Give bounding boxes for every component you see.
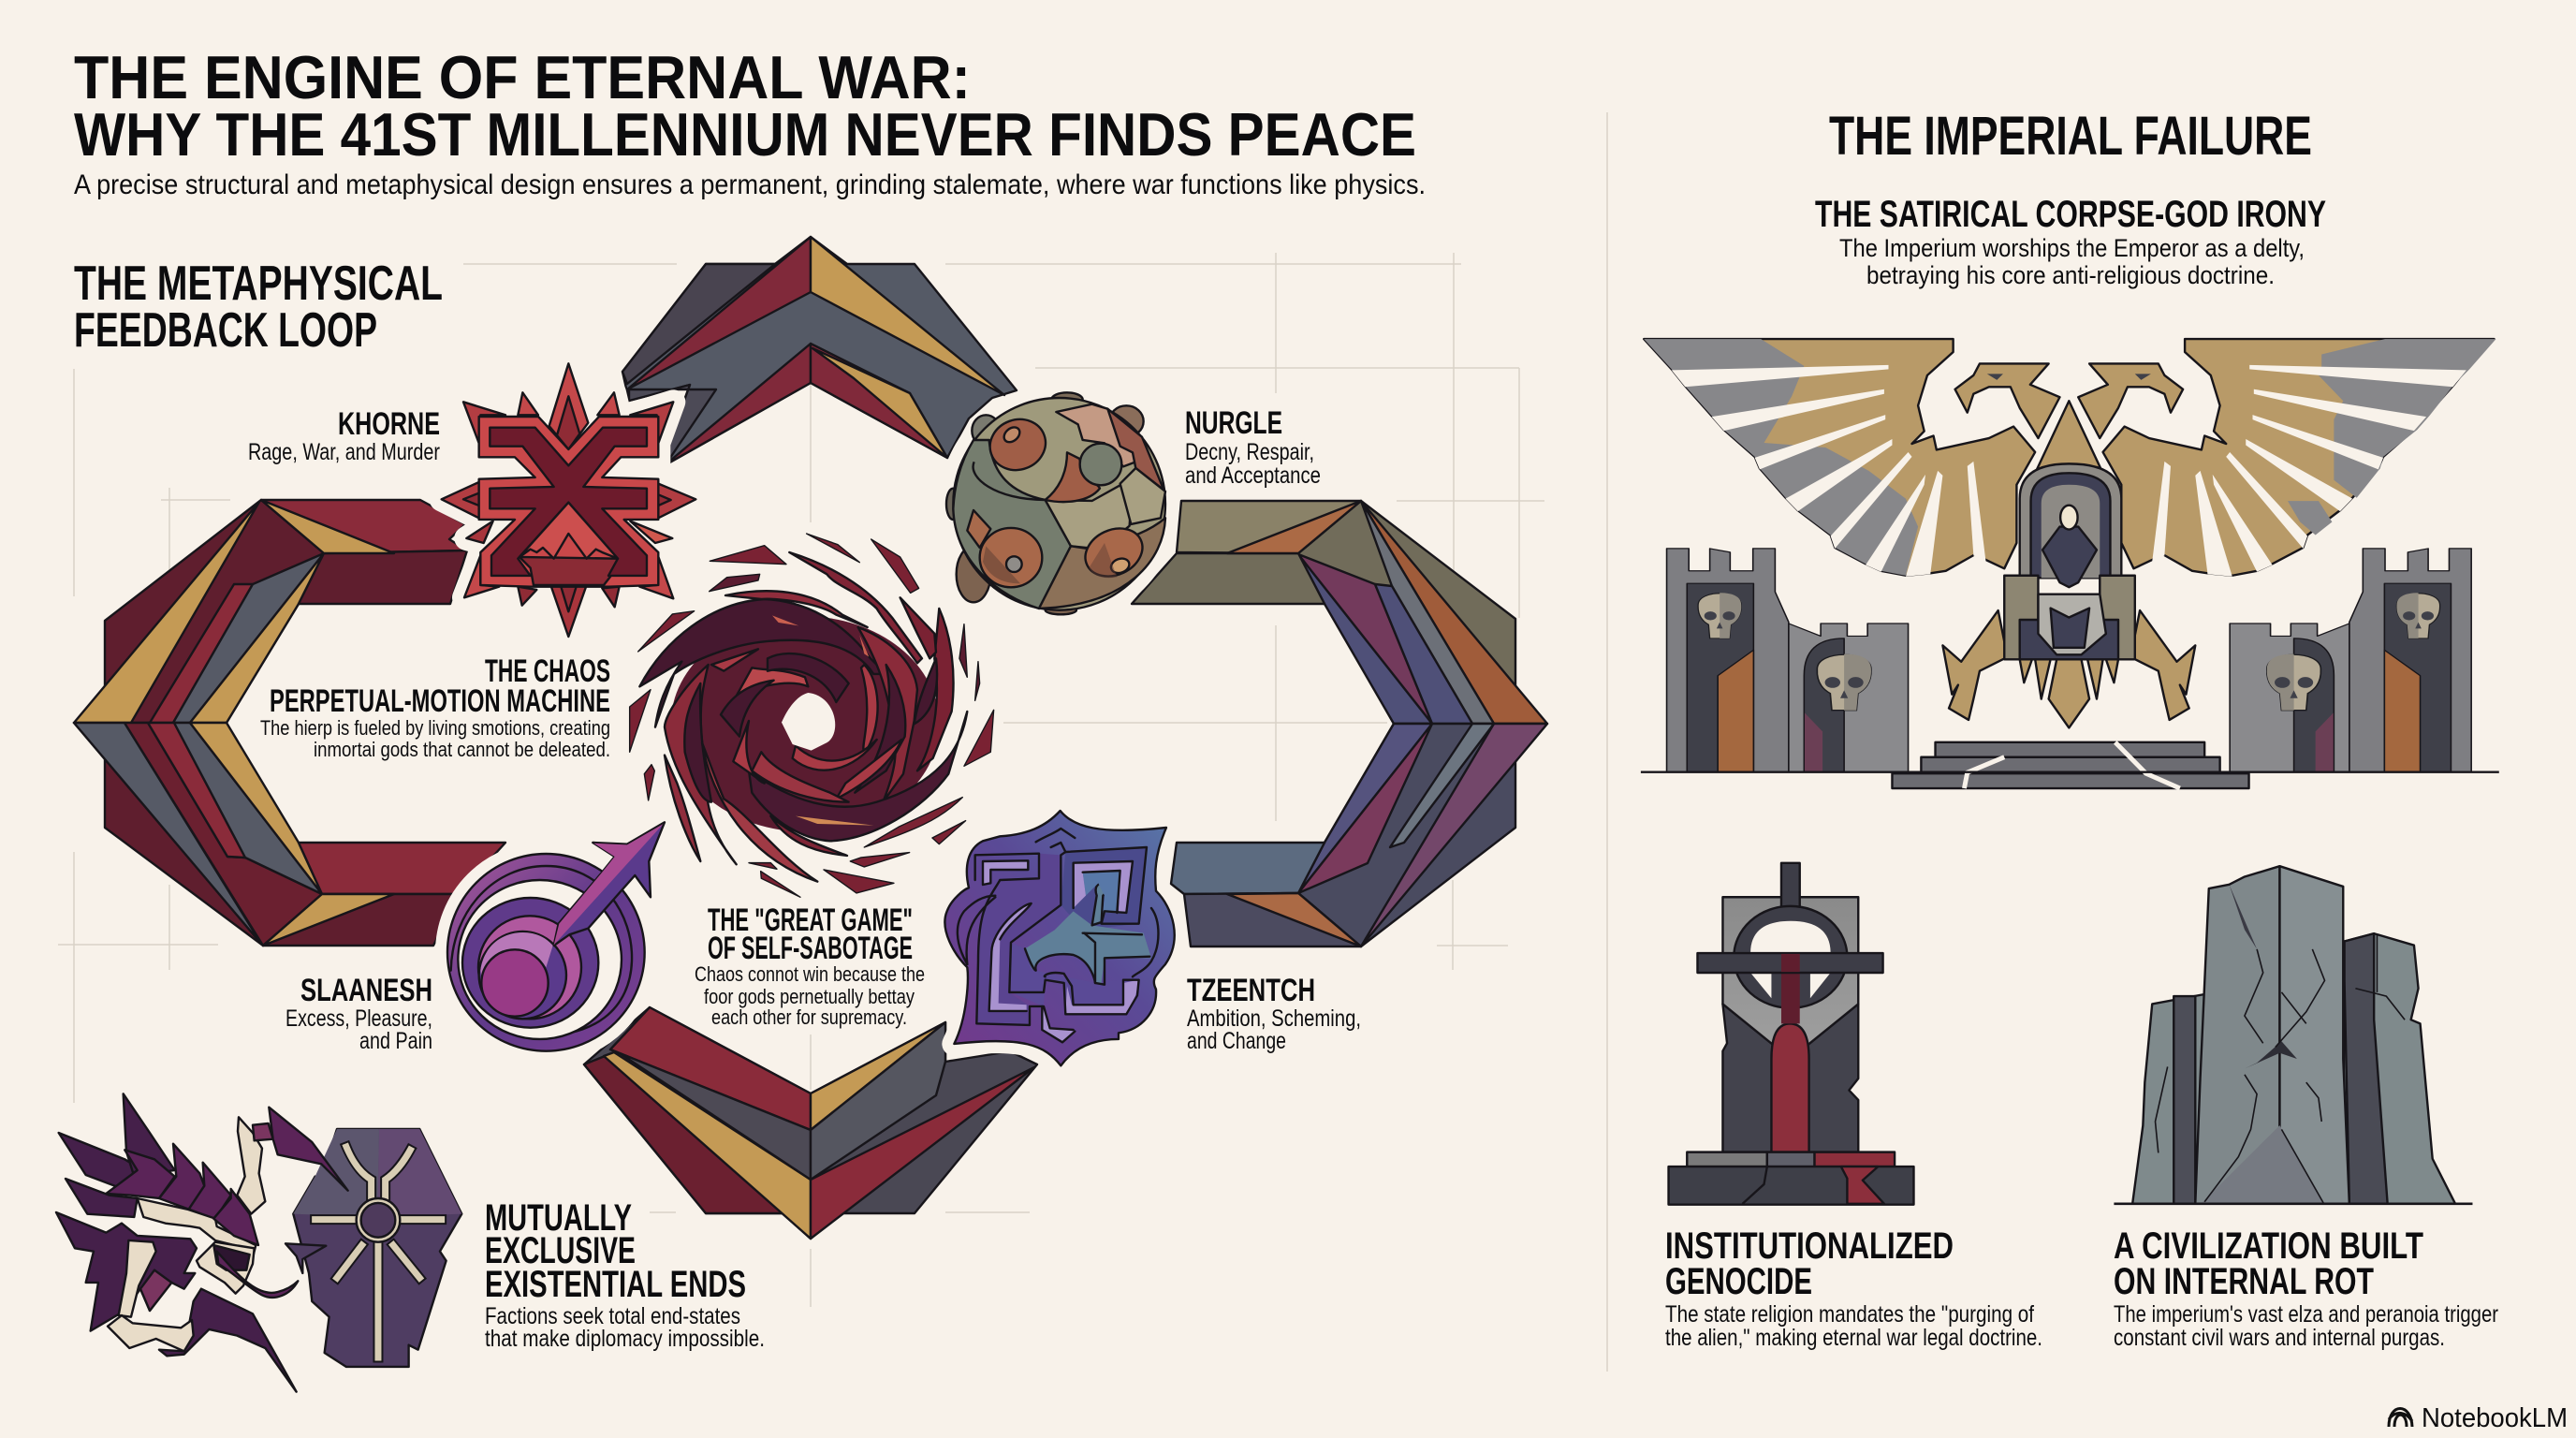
right wing: [2103, 339, 2496, 577]
text: satirical corpse-god irony: betraying his core anti-religious doctrine.: [1866, 261, 2275, 289]
text: satirical corpse-god irony: [1815, 194, 2326, 289]
label: Tzeentch: Ambition, Scheming,: [1187, 1005, 1361, 1032]
cracked steps: [1892, 742, 2249, 788]
text: the great game: Chaos connot win because the: [695, 962, 925, 986]
arrow: right arm: [1132, 501, 1547, 946]
label: Nurgle: Decny, Respair,: [1185, 439, 1314, 465]
text: the great game: THE "GREAT GAME": [708, 902, 913, 938]
text: chaos perpetual-motion machine: PERPETUAL-MOTION MACHINE: [270, 683, 610, 719]
text: the great game: OF SELF-SABOTAGE: [708, 931, 913, 966]
text: chaos perpetual-motion machine: The hierp is fueled by living smotions, creating: [260, 716, 610, 740]
icon: Nurgle: [946, 392, 1167, 614]
text: mutually exclusive existential ends: that make diplomacy impossible.: [485, 1326, 765, 1352]
text: chaos perpetual-motion machine: THE CHAOS: [485, 653, 610, 689]
text: institutionalized genocide: The state religion mandates the "purging of: [1665, 1301, 2034, 1328]
title: [74, 43, 1416, 169]
label: Slaanesh: SLAANESH: [300, 973, 432, 1008]
subtitle: A precise structural and metaphysical design ensures a permanent, grinding stalemate, where war functions like physics.: [74, 169, 1426, 200]
text: institutionalized genocide: GENOCIDE: [1665, 1261, 1812, 1302]
text: mutually exclusive existential ends: MUTUALLY: [485, 1197, 632, 1239]
title: THE ENGINE OF ETERNAL WAR:: [74, 43, 971, 111]
text: civilization built on internal rot: ON INTERNAL ROT: [2114, 1261, 2374, 1302]
label: Tzeentch: and Change: [1187, 1028, 1286, 1054]
text: chaos perpetual-motion machine: [260, 653, 610, 761]
label: Nurgle: NURGLE: [1185, 405, 1282, 441]
text: institutionalized genocide: the alien," making eternal war legal doctrine.: [1665, 1325, 2042, 1351]
icon: Tzeentch: [944, 811, 1175, 1065]
label: Nurgle: [1185, 405, 1321, 489]
icon: chaos vortex: [630, 534, 994, 897]
label: Tzeentch: [1187, 973, 1361, 1054]
text: satirical corpse-god irony: The Imperium worships the Emperor as a delty,: [1839, 234, 2305, 262]
text: the great game: each other for supremacy.: [711, 1005, 907, 1029]
arrow: left arm: [74, 500, 505, 946]
text: institutionalized genocide: INSTITUTIONALIZED: [1665, 1225, 1954, 1267]
heading: metaphysical feedback loop: FEEDBACK LOOP: [74, 303, 377, 358]
icon: tyranid creature and faction shield: [56, 1093, 461, 1392]
text: civilization built on internal rot: The imperium's vast elza and peranoia trigger: [2114, 1301, 2498, 1328]
arrow: top chevron: [622, 237, 1017, 468]
text: the great game: foor gods pernetually bettay: [704, 985, 915, 1008]
text: chaos perpetual-motion machine: inmortai gods that cannot be deleated.: [314, 738, 610, 761]
text: mutually exclusive existential ends: Factions seek total end-states: [485, 1303, 740, 1329]
arrow: bottom chevron: [584, 1007, 1037, 1239]
illustration: genocide monument: [1669, 863, 1913, 1205]
text: satirical corpse-god irony: THE SATIRICAL CORPSE-GOD IRONY: [1815, 194, 2326, 235]
text: mutually exclusive existential ends: [485, 1197, 765, 1352]
icon: Khorne: [442, 363, 695, 637]
label: Slaanesh: [285, 973, 432, 1054]
label: Nurgle: and Acceptance: [1185, 462, 1321, 489]
label: Khorne: KHORNE: [338, 406, 440, 442]
text: civilization built on internal rot: A CIVILIZATION BUILT: [2114, 1225, 2423, 1267]
label: Tzeentch: TZEENTCH: [1187, 973, 1315, 1008]
heading: metaphysical feedback loop: THE METAPHYSICAL: [74, 257, 443, 311]
icon: Slaanesh: [447, 822, 665, 1051]
label: Khorne: Rage, War, and Murder: [248, 439, 440, 465]
title: WHY THE 41ST MILLENNIUM NEVER FINDS PEACE: [74, 100, 1416, 169]
left wing: [1644, 339, 2035, 577]
text: institutionalized genocide: [1665, 1225, 2042, 1351]
towers with skulls: [1667, 549, 1909, 772]
illustration: cracked civilization rock: [2114, 866, 2472, 1204]
talons and tail: [1942, 610, 2195, 727]
heading: metaphysical feedback loop: [74, 257, 443, 358]
text: civilization built on internal rot: constant civil wars and internal purgas.: [2114, 1325, 2445, 1351]
illustration: imperial aquila, throne and towers: [1641, 339, 2499, 788]
throne with emperor: [2004, 463, 2135, 659]
label: Khorne: [248, 406, 440, 465]
label: Slaanesh: and Pain: [359, 1028, 432, 1054]
text: the great game: [695, 902, 925, 1029]
heading: the imperial failure: THE IMPERIAL FAILURE: [1829, 106, 2312, 167]
eagle heads: [1955, 363, 2183, 473]
text: mutually exclusive existential ends: EXCLUSIVE: [485, 1230, 636, 1271]
text: mutually exclusive existential ends: EXISTENTIAL ENDS: [485, 1264, 746, 1305]
label: Slaanesh: Excess, Pleasure,: [285, 1005, 432, 1032]
logo: NotebookLM: NotebookLM: [2422, 1403, 2568, 1433]
text: civilization built on internal rot: [2114, 1225, 2498, 1351]
